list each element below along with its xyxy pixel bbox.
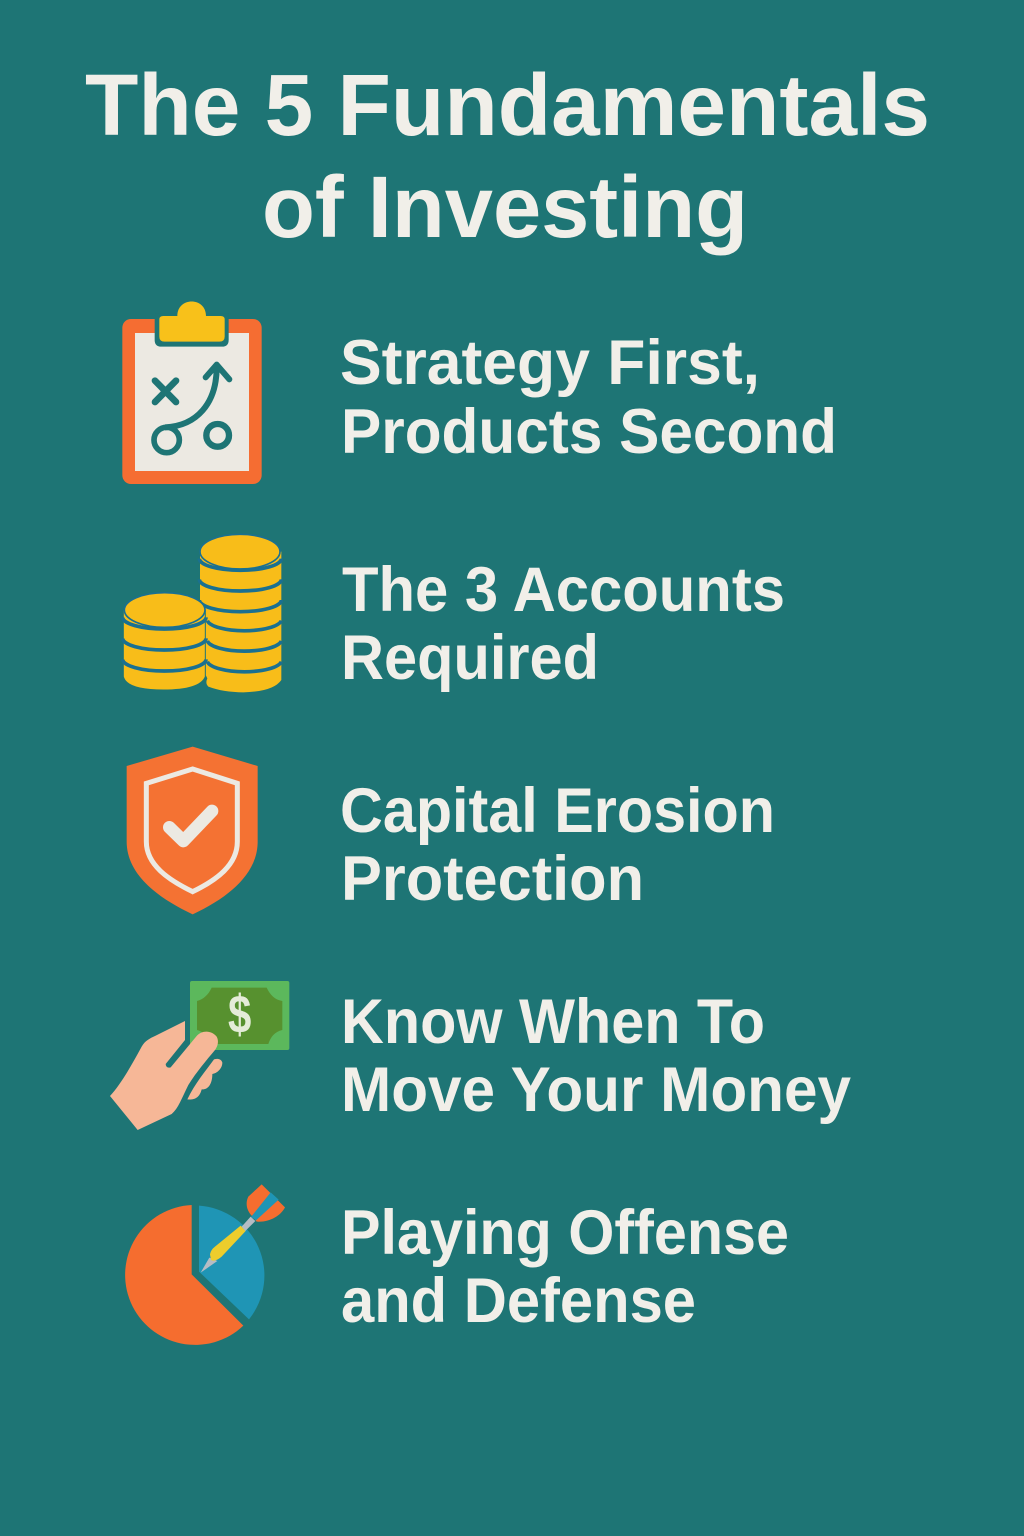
text: capital erosion protection: Protection bbox=[341, 844, 644, 914]
text: strategy first, products second: Products Second bbox=[341, 397, 837, 467]
text: the 3 accounts required: The 3 Accounts bbox=[342, 555, 785, 625]
text: playing offense and defense: and Defense bbox=[341, 1266, 696, 1336]
text: strategy first, products second bbox=[340, 328, 837, 467]
text: know when to move your money: Know When To bbox=[341, 987, 765, 1057]
icon: clipboard with play diagram bbox=[122, 301, 262, 484]
icon: shield with check mark bbox=[127, 747, 258, 914]
dollar sign: $ bbox=[228, 985, 251, 1044]
text: the 3 accounts required bbox=[341, 555, 785, 693]
title bbox=[85, 57, 930, 256]
text: strategy first, products second: Strategy First, bbox=[340, 328, 760, 398]
text: capital erosion protection: Capital Erosion bbox=[340, 776, 775, 846]
text: know when to move your money: Move Your Money bbox=[341, 1055, 851, 1125]
icon: stacks of gold coins bbox=[123, 534, 281, 692]
text: the 3 accounts required: Required bbox=[341, 623, 599, 693]
text: capital erosion protection bbox=[340, 776, 775, 914]
text: playing offense and defense: Playing Offense bbox=[341, 1198, 789, 1268]
icon: pie chart with dart bbox=[125, 1184, 285, 1345]
title: The 5 Fundamentals bbox=[85, 57, 930, 154]
text: playing offense and defense bbox=[341, 1198, 789, 1336]
icon: hand holding dollar bill bbox=[110, 981, 289, 1130]
title: of Investing bbox=[262, 159, 748, 256]
text: know when to move your money bbox=[341, 987, 851, 1125]
